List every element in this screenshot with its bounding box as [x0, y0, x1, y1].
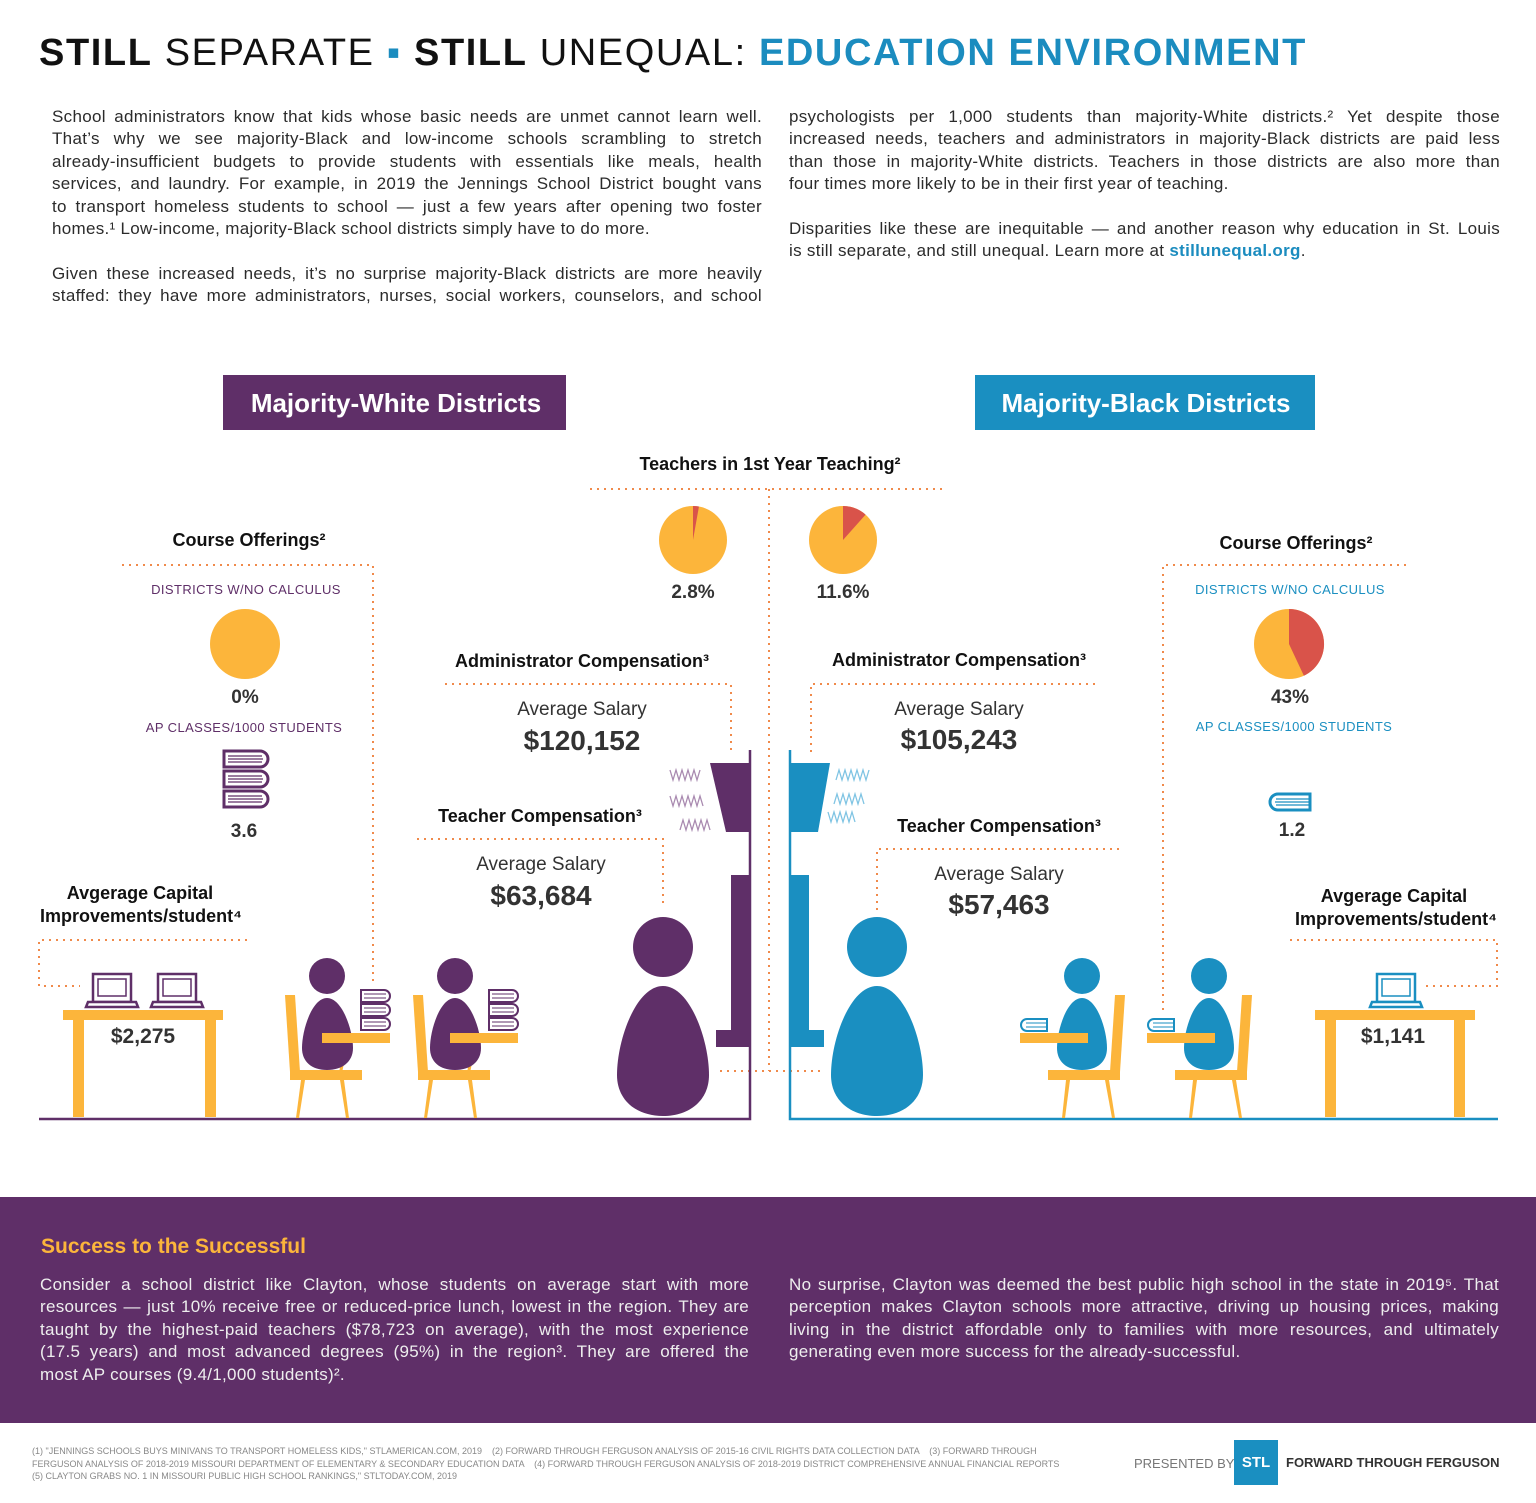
intro text right: Disparities like these are inequitable — and another reason why education in St. Louis [789, 219, 1500, 238]
logo: presented by forward through ferguson: PRESENTED BY [1134, 1456, 1234, 1471]
panel text left: taught by the highest-paid teachers ($78,723 on average), with the most experience [40, 1320, 749, 1339]
bottom panel: success to the successful [0, 1197, 1536, 1423]
panel text left [40, 1275, 749, 1384]
panel text right: generating even more success for the already-successful. [789, 1342, 1240, 1361]
panel heading: Success to the Successful [41, 1235, 306, 1258]
table with laptop right [1315, 974, 1475, 1117]
logo: presented by forward through ferguson: STL [1242, 1454, 1270, 1471]
heading: majority-black: Majority-Black Districts [1002, 388, 1290, 418]
course offerings right: 1.2 [1279, 820, 1305, 841]
admin comp left: $120,152 [524, 725, 640, 756]
intro text left: to transport homeless students to school — just a few years after opening two foster [52, 197, 762, 216]
course offerings left: 3.6 [231, 821, 257, 842]
course offerings right: AP CLASSES/1000 STUDENTS [1196, 719, 1392, 734]
capital right: Improvements/student⁴ [1295, 909, 1497, 929]
course offerings right: Course Offerings² [1219, 533, 1373, 553]
panel text right: No surprise, Clayton was deemed the best public high school in the state in 2019⁵. That [789, 1275, 1499, 1294]
capital right: Avgerage Capital [1321, 886, 1467, 906]
intro text right: than those in majority-White districts. Teachers in those districts are also more than [789, 152, 1500, 171]
table with laptops left [63, 974, 223, 1117]
intro text right: is still separate, and still unequal. Learn more at stillunequal.org. [789, 241, 1306, 260]
intro text left: staffed: they have more administrators, nurses, social workers, counselors, and school [52, 286, 762, 305]
teachers in 1st year: 2.8% [671, 582, 715, 603]
admin comp right: Average Salary [894, 699, 1024, 720]
teachers in 1st year [639, 454, 901, 603]
table with laptop right: $1,141 [1361, 1025, 1425, 1048]
intro text left: That’s why we see majority-Black and low-income schools scrambling to stretch [52, 129, 762, 148]
speaker and wall right [790, 763, 869, 1047]
course offerings left: Course Offerings² [172, 530, 326, 550]
table with laptops left: $2,275 [111, 1025, 175, 1048]
course offerings left [146, 530, 342, 842]
teacher comp right: Teacher Compensation³ [897, 816, 1101, 836]
admin comp right [832, 650, 1086, 755]
teacher comp right [897, 816, 1101, 920]
teachers in 1st year: 11.6% [817, 582, 870, 603]
admin comp left: Administrator Compensation³ [455, 651, 709, 671]
intro text left: services, and laundry. For example, in 2019 the Jennings School District bought vans [52, 174, 762, 193]
intro text right: psychologists per 1,000 students than majority-White districts.² Yet despite those [789, 107, 1500, 126]
intro text left [52, 107, 762, 305]
course offerings left: AP CLASSES/1000 STUDENTS [146, 720, 342, 735]
heading: majority-white: Majority-White Districts [251, 388, 541, 418]
panel text left: Consider a school district like Clayton, whose students on average start with more [40, 1275, 749, 1294]
panel text right [789, 1275, 1499, 1361]
course offerings left: DISTRICTS W/NO CALCULUS [151, 582, 341, 597]
intro text left: School administrators know that kids whose basic needs are unmet cannot learn well. [52, 107, 762, 126]
heading: majority-black [975, 375, 1315, 430]
intro text left: already-insufficient budgets to provide students with essentials like meals, health [52, 152, 762, 171]
capital left [40, 883, 242, 926]
teachers in 1st year: Teachers in 1st Year Teaching² [639, 454, 901, 474]
panel text right: living in the district affordable only to families with more resources, and ultimately [789, 1320, 1499, 1339]
admin comp left [455, 651, 709, 756]
teacher comp right: Average Salary [934, 864, 1064, 885]
admin comp left: Average Salary [517, 699, 647, 720]
teacher right [831, 917, 923, 1116]
intro text right [789, 107, 1500, 260]
illustration [38, 375, 1498, 1120]
title: STILL SEPARATE ▪ STILL UNEQUAL: EDUCATION ENVIRONMENT [39, 32, 1307, 74]
heading: majority-white [223, 375, 566, 430]
intro text left: homes.¹ Low-income, majority-Black school districts simply have to do more. [52, 219, 650, 238]
teacher comp right: $57,463 [948, 889, 1050, 920]
course offerings right [1195, 533, 1392, 841]
students left [285, 958, 518, 1118]
speaker and wall left [670, 763, 750, 1047]
course offerings right: 43% [1271, 687, 1309, 708]
course offerings left: 0% [231, 687, 259, 708]
intro text right: increased needs, teachers and administrators in majority-Black districts are paid less [789, 129, 1500, 148]
intro text right: four times more likely to be in their first year of teaching. [789, 174, 1229, 193]
teacher left [617, 917, 709, 1116]
logo: presented by forward through ferguson [1134, 1440, 1500, 1485]
panel text left: resources — just 10% receive free or reduced-price lunch, lowest in the region. They are [40, 1297, 749, 1316]
course offerings right: DISTRICTS W/NO CALCULUS [1195, 582, 1385, 597]
capital right [1295, 886, 1497, 929]
intro text left: Given these increased needs, it’s no surprise majority-Black districts are more heavily [52, 264, 762, 283]
capital left: Avgerage Capital [67, 883, 213, 903]
teacher comp left: $63,684 [490, 880, 592, 911]
logo: presented by forward through ferguson: FORWARD THROUGH FERGUSON [1286, 1455, 1500, 1470]
admin comp right: Administrator Compensation³ [832, 650, 1086, 670]
panel text right: perception makes Clayton schools more attractive, driving up housing prices, making [789, 1297, 1499, 1316]
students right [1020, 958, 1252, 1118]
capital left: Improvements/student⁴ [40, 906, 242, 926]
admin comp right: $105,243 [901, 724, 1017, 755]
teacher comp left [438, 806, 642, 911]
panel text left: most AP courses (9.4/1,000 students)². [40, 1365, 345, 1384]
floors and walls [39, 750, 1498, 1119]
footnotes: (1) "JENNINGS SCHOOLS BUYS MINIVANS TO TRANSPORT HOMELESS KIDS," STLAMERICAN.COM, 2019 (2) FORWARD THROUGH FERGUSON ANALYSIS OF 2015-16 CIVIL RIGHTS DATA COLLECTION DATA (3) FORWARD THROUGH FERGUSON ANALYSIS OF 2018-2019 MISSOURI DEPARTMENT OF ELEMENTARY & SECONDARY EDUCATION DATA (4) FORWARD THROUGH FERGUSON ANALYSIS OF 2018-2019 DISTRICT COMPREHENSIVE ANNUAL FINANCIAL REPORTS (5) CLAYTON GRABS NO. 1 IN MISSOURI PUBLIC HIGH SCHOOL RANKINGS," STLTODAY.COM, 2019 [32, 1446, 1067, 1481]
teacher comp left: Average Salary [476, 854, 606, 875]
teacher comp left: Teacher Compensation³ [438, 806, 642, 826]
panel text left: (17.5 years) and most advanced degrees (95%) in the region³. They are offered the [40, 1342, 749, 1361]
